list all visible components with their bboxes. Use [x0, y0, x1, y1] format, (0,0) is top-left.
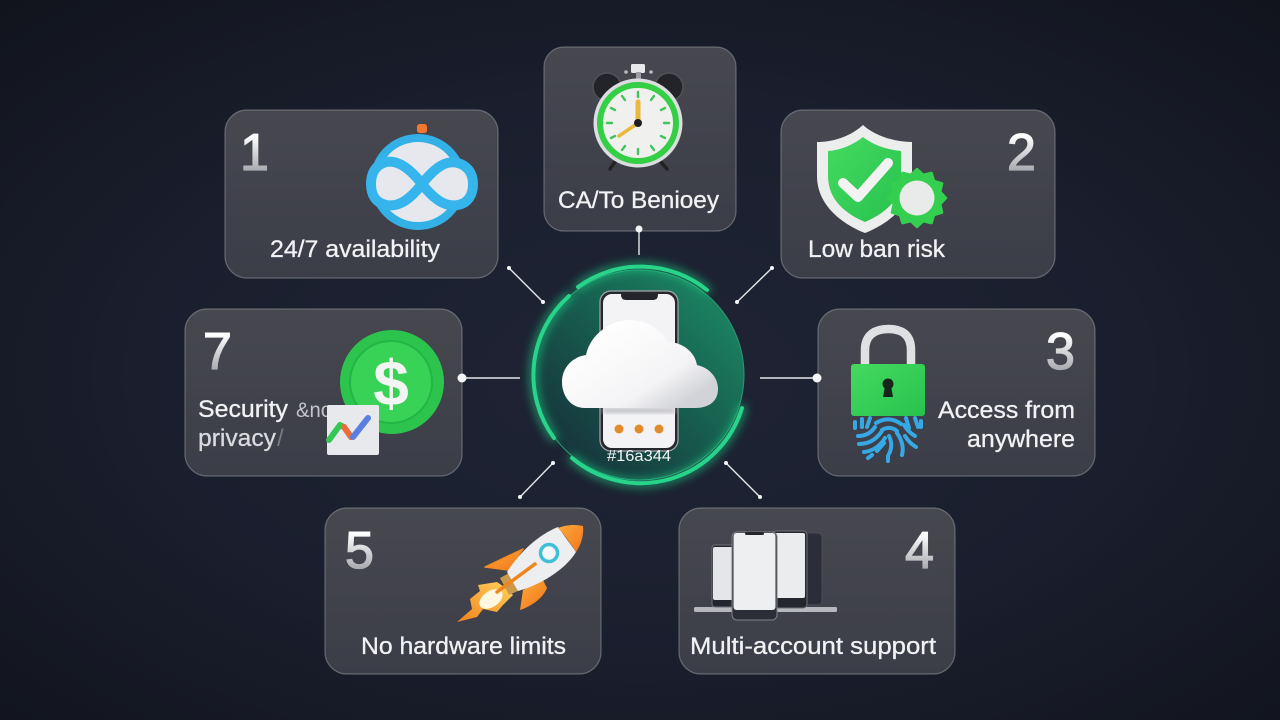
panel: 5 hardware	[325, 508, 601, 674]
connector lines	[458, 226, 822, 499]
label: security: &no	[296, 399, 332, 422]
panel: 3 access	[818, 309, 1095, 476]
label: security: Security	[198, 396, 288, 423]
icon: shield and gear	[817, 125, 946, 233]
central hub	[533, 267, 744, 483]
label: anywhere: anywhere	[967, 426, 1075, 453]
icon: infinity	[371, 124, 473, 226]
icon: dollar coin	[340, 330, 444, 434]
label: availability: 24/7 availability	[270, 236, 440, 263]
number 3: 3	[1046, 323, 1075, 381]
icon: smartphone	[600, 291, 678, 451]
number 2: 2	[1007, 124, 1036, 182]
label: ban risk: Low ban risk	[808, 236, 946, 263]
icon: cloud	[562, 320, 718, 413]
icon: device group	[694, 531, 837, 620]
number 1: 1	[240, 124, 269, 182]
label: hardware: No hardware limits	[361, 633, 566, 660]
ring arcs glow	[533, 267, 742, 483]
label: multi-account: Multi-account support	[690, 633, 936, 660]
icon: rocket	[457, 525, 583, 622]
panel: top clock card	[544, 47, 736, 231]
label: security	[198, 396, 332, 423]
label: privacy: /	[277, 425, 284, 452]
label: access from: Access from	[938, 397, 1075, 424]
hub disc	[534, 270, 744, 480]
panel: 4 multi-account	[679, 508, 955, 674]
label: clock card: CA/To Benioey	[558, 187, 719, 214]
ring arcs	[533, 267, 742, 483]
icon: dollar coin: $	[373, 347, 409, 419]
hub caption: #16a344	[607, 448, 671, 465]
panel: 1 availability	[225, 110, 498, 278]
number 4: 4	[905, 522, 934, 580]
panel: 2 ban risk	[781, 110, 1055, 278]
number 7: 7	[203, 323, 232, 381]
number 5: 5	[345, 522, 374, 580]
label: privacy: privacy	[198, 425, 276, 452]
icon: alarm clock	[593, 64, 683, 169]
icon: chart tile	[327, 405, 379, 455]
panel: 7 security	[185, 309, 462, 476]
icon: padlock with fingerprint	[851, 329, 925, 461]
